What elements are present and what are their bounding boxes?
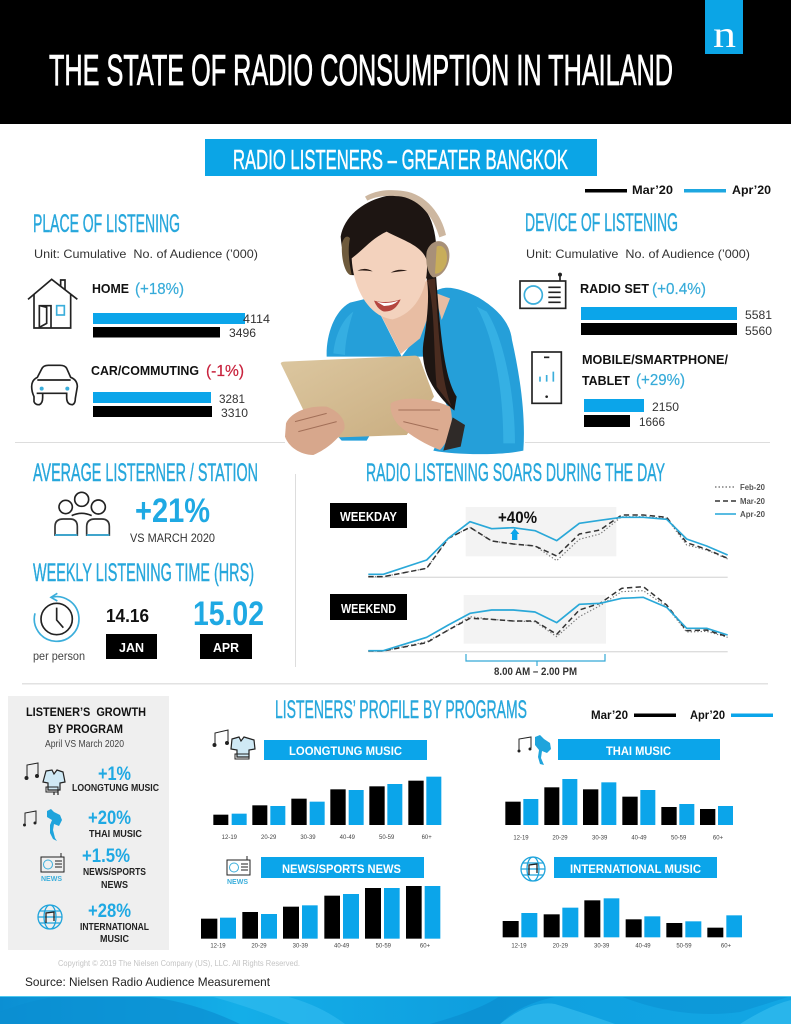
icon: thai music: [518, 735, 551, 765]
change: car: (-1%): [206, 363, 244, 380]
bar chart: loongtung: 50-59: [379, 835, 395, 841]
back hair and ponytail: [341, 195, 457, 411]
icon: international: [521, 857, 545, 881]
stat: international: +28%: [88, 901, 131, 922]
bars: mobile: 1666: [639, 415, 665, 429]
bar chart: thai music: 50-59: [671, 836, 687, 842]
headphones: [365, 190, 446, 237]
icon: music note and shirt: [25, 763, 65, 795]
icon: clock: [34, 593, 79, 641]
bar chart: loongtung: 40-49: [340, 835, 356, 841]
bars: radio set: 5560: [745, 324, 772, 338]
label: car: CAR/COMMUTING: [91, 363, 199, 378]
bar chart: thai music: 20-29: [552, 836, 568, 842]
chart header: thai music: [558, 739, 720, 760]
line chart: weekday: [368, 507, 728, 577]
bar chart: loongtung: [213, 777, 441, 841]
tablet: [281, 356, 434, 437]
chart header: international: INTERNATIONAL MUSIC: [570, 862, 701, 876]
icon: radio: [520, 273, 566, 308]
stat: news: NEWS: [101, 880, 128, 891]
tag: weekend: [330, 594, 407, 620]
bar chart: news: [201, 886, 440, 950]
icon: news: [227, 856, 250, 886]
tag: apr: [200, 634, 252, 659]
stat: +21%: +21%: [135, 492, 210, 530]
tag: apr: APR: [213, 640, 240, 655]
banner: radio listeners: RADIO LISTENERS – GREATER BANGKOK: [233, 144, 568, 175]
tag: weekday: WEEKDAY: [340, 509, 397, 524]
bar chart: thai music: [505, 779, 733, 842]
bars: mobile: 2150: [652, 400, 679, 414]
bar chart: international: 60+: [721, 944, 732, 950]
neck: [377, 277, 450, 354]
tag: weekday: [330, 503, 407, 528]
header band: [0, 0, 791, 124]
panel: listener's growth by program: [8, 696, 169, 950]
bar chart: loongtung: 60+: [422, 835, 432, 841]
bar chart: loongtung: 30-39: [300, 835, 316, 841]
bar chart: thai music: 60+: [713, 836, 724, 842]
bar chart: news: 50-59: [376, 944, 392, 950]
stat: news: +1.5%: [82, 846, 130, 867]
bars: car: 3281: [219, 392, 245, 406]
heading: weekly listening: WEEKLY LISTENING TIME (HRS): [33, 559, 254, 587]
label: home: HOME: [92, 281, 129, 296]
icon: globe with note: [38, 905, 62, 929]
hands: [285, 406, 345, 455]
change: radio set: (+0.4%): [652, 281, 706, 298]
icon: people: [55, 492, 109, 535]
caption: per person: per person: [33, 649, 85, 663]
chart header: loongtung: [264, 740, 427, 760]
copyright: Copyright © 2019 The Nielsen Company (US), LLC. All Rights Reserved.: [58, 959, 300, 968]
heading: average listener: AVERAGE LISTERNER / STATION: [33, 459, 258, 487]
stat: international: MUSIC: [100, 934, 129, 945]
bracket: time range: [466, 654, 605, 678]
bar chart: international: 40-49: [635, 944, 651, 950]
legend: profile: Apr’20: [690, 708, 725, 722]
icon: smartphone: [532, 352, 561, 403]
bar chart: international: 30-39: [594, 944, 610, 950]
stat: international: INTERNATIONAL: [80, 922, 149, 933]
heading: growth: [26, 705, 146, 750]
label: mobile: TABLET: [582, 373, 630, 388]
legend: line chart: Apr-20: [740, 510, 766, 519]
bar chart: international: [503, 898, 742, 950]
stat: loongtung: LOONGTUNG MUSIC: [72, 783, 159, 794]
caption: vs march: VS MARCH 2020: [130, 531, 215, 545]
line chart: weekend: [368, 587, 728, 652]
logo: Nielsen: [705, 0, 743, 56]
panel: weekly listening time: [33, 559, 264, 663]
chart header: loongtung: LOONGTUNG MUSIC: [289, 744, 402, 758]
heading: listeners' profile: LISTENERS’ PROFILE BY PROGRAMS: [275, 696, 527, 724]
unit note: Unit: Cumulative No. of Audience (’000): [526, 247, 750, 261]
sweater: [327, 288, 524, 454]
bars: car: 3310: [221, 406, 248, 420]
footer wave band: [0, 996, 791, 1024]
stat: international: [80, 901, 149, 945]
change: mobile: (+29%): [636, 372, 685, 389]
icon: car: [32, 365, 77, 405]
panel: place of listening: [28, 210, 270, 420]
stat: january: 14.16: [106, 606, 149, 626]
stat: april: 15.02: [193, 595, 264, 633]
bars: home: 4114: [243, 312, 270, 326]
banner: radio listeners: [205, 139, 597, 176]
bracket: time range: 8.00 AM – 2.00 PM: [494, 666, 577, 678]
icon: music note and thailand: [23, 809, 62, 841]
bar chart: news: 40-49: [334, 944, 350, 950]
bar chart: loongtung: 12-19: [222, 835, 238, 841]
bar chart: international: 20-29: [553, 944, 569, 950]
tag: weekend: WEEKEND: [341, 601, 396, 616]
icon: news radio: NEWS: [41, 876, 62, 883]
change: home: (+18%): [135, 281, 184, 298]
bar chart: thai music: 40-49: [631, 836, 647, 842]
bars: mobile: [584, 399, 679, 429]
stat: loongtung: +1%: [98, 764, 131, 785]
heading: growth: BY PROGRAM: [48, 722, 123, 736]
stat: thai: +20%: [88, 808, 131, 829]
bar chart: news: 60+: [420, 944, 431, 950]
icon: loongtung: [213, 730, 255, 759]
chart header: thai music: THAI MUSIC: [606, 744, 671, 758]
bar chart: international: 12-19: [511, 944, 527, 950]
legend: top: Apr’20: [732, 183, 771, 197]
label: mobile: MOBILE/SMARTPHONE/: [582, 352, 728, 367]
label: mobile: [582, 352, 728, 388]
legend: profile: Mar’20: [591, 708, 628, 722]
stat: loongtung: [72, 764, 159, 794]
panel: radio listening during the day: [330, 459, 766, 678]
icon: news radio: [41, 853, 64, 883]
stat: thai: [88, 808, 142, 840]
label: radio set: RADIO SET: [580, 281, 649, 296]
stat: news: NEWS/SPORTS: [83, 867, 146, 878]
bars: car: [93, 392, 248, 420]
bars: radio set: 5581: [745, 308, 772, 322]
icon: house: [28, 279, 77, 328]
bars: home: 3496: [229, 326, 256, 340]
heading: place of listening: PLACE OF LISTENING: [33, 210, 180, 238]
legend: top: [585, 183, 771, 197]
heading: growth: April VS March 2020: [45, 739, 124, 750]
bar chart: thai music: 30-39: [592, 836, 608, 842]
bar chart: international: 50-59: [676, 944, 692, 950]
bar chart: thai music: 12-19: [513, 836, 529, 842]
bar chart: news: 12-19: [210, 944, 226, 950]
icon: news: NEWS: [227, 879, 248, 886]
bar chart: news: 20-29: [251, 944, 267, 950]
legend: line chart: Mar-20: [740, 497, 766, 506]
unit note: Unit: Cumulative No. of Audience (’000): [34, 247, 258, 261]
panel: device of listening: [520, 209, 772, 429]
legend: top: Mar’20: [632, 183, 673, 197]
heading: growth: LISTENER’S GROWTH: [26, 705, 146, 719]
bar chart: loongtung: 20-29: [261, 835, 277, 841]
chart header: news: [261, 857, 424, 878]
legend: line chart: [715, 483, 766, 519]
chart header: international: [554, 857, 717, 878]
callout: +40%: +40%: [498, 508, 537, 527]
stat: news: [82, 846, 146, 891]
panel: average listener: [33, 459, 258, 545]
source: Source: Nielsen Radio Audience Measurement: [25, 975, 271, 989]
bars: radio set: [581, 307, 772, 338]
tag: jan: [106, 634, 157, 659]
legend: line chart: Feb-20: [740, 483, 766, 492]
bar chart: news: 30-39: [293, 944, 309, 950]
face: [352, 232, 427, 319]
stat: thai: THAI MUSIC: [89, 829, 142, 840]
logo: Nielsen: n: [713, 14, 736, 56]
tag: jan: JAN: [119, 640, 144, 655]
legend: profile: [591, 708, 773, 722]
illustration: woman with headphones and tablet: [281, 190, 524, 455]
heading: device of listening: DEVICE OF LISTENING: [525, 209, 678, 237]
chart header: news: NEWS/SPORTS NEWS: [282, 862, 401, 876]
bars: home: [93, 312, 270, 340]
